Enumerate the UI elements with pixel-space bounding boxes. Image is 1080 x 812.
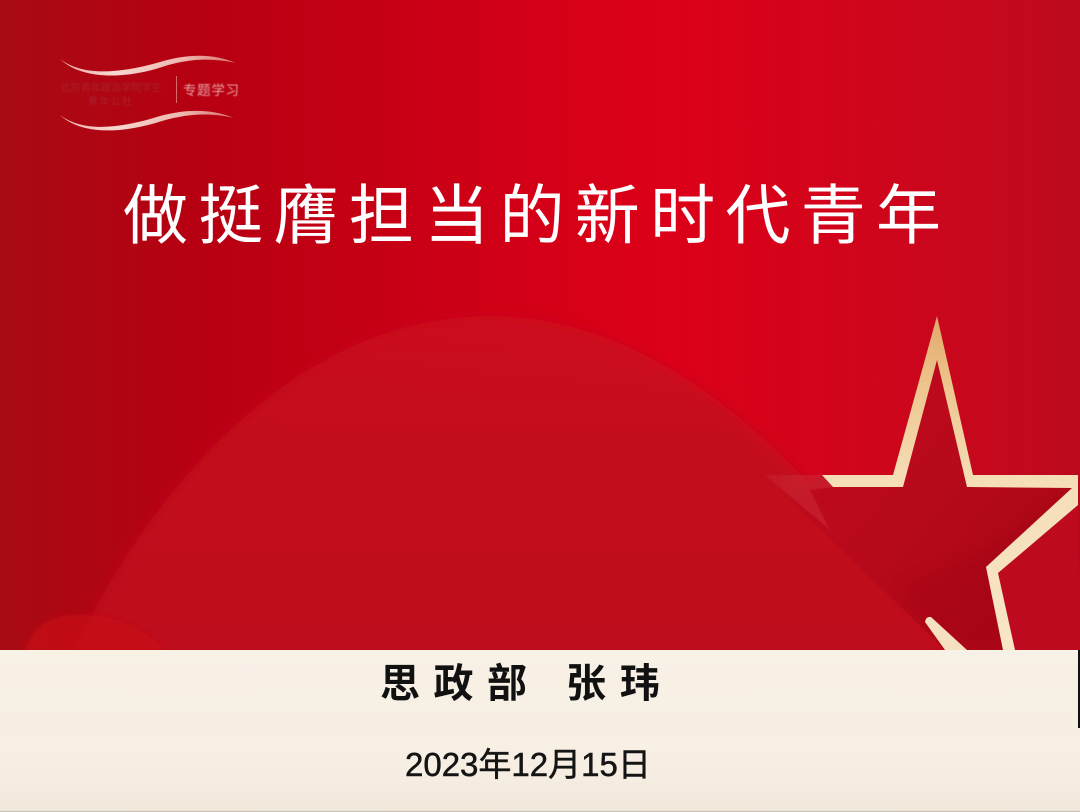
star body: [790, 316, 1078, 650]
logo ribbons: [60, 56, 236, 76]
lighter blob lower left: [24, 614, 94, 650]
title: 做挺膺担当的新时代青年: [123, 179, 951, 252]
gold star outline: [822, 316, 1078, 650]
star right of leg: [998, 505, 1078, 650]
logo text: 北京青年政治学院学生: [60, 81, 162, 94]
footer band: [0, 650, 1080, 812]
right edge line: [1078, 650, 1080, 728]
logo: 专题学习: [183, 83, 239, 98]
presenter name: 思政部 张玮: [380, 662, 673, 706]
logo divider: [176, 76, 177, 103]
logo: [60, 56, 239, 130]
darker arc shape: [94, 316, 940, 650]
shadow on lower star: [900, 480, 1078, 650]
ghost left arm of star: [765, 475, 833, 530]
logo: 青年公社: [88, 95, 132, 108]
date: 2023年12月15日: [405, 746, 651, 783]
